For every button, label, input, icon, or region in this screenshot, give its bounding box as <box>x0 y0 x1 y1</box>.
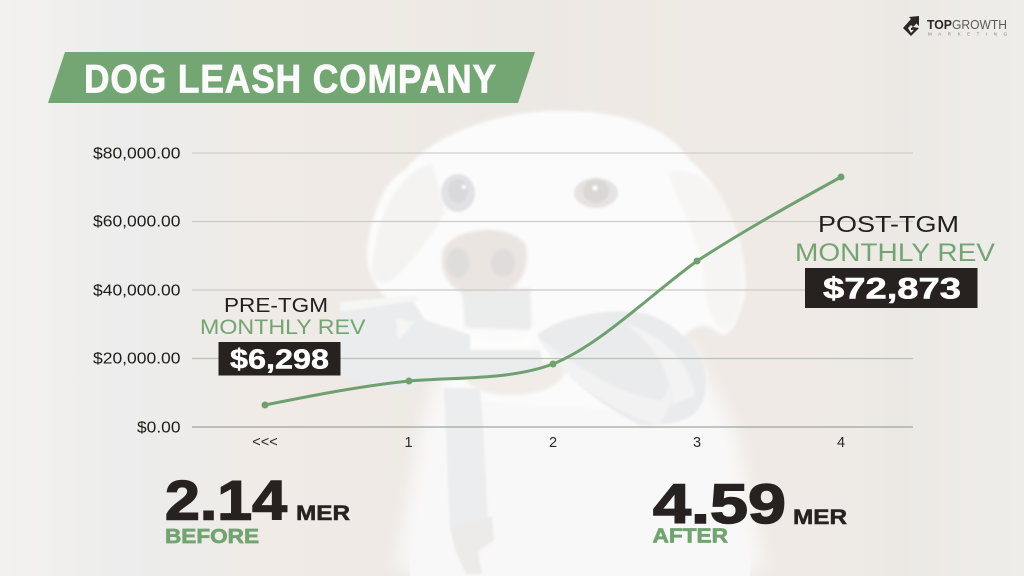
leash strap loops <box>340 295 706 574</box>
y axis labels: $40,000.00 <box>93 282 181 300</box>
x axis labels: <<< <box>252 434 278 450</box>
logo wordmark: TOP <box>927 18 952 32</box>
stat: before MER <box>165 468 350 548</box>
x axis labels: 2 <box>549 435 557 451</box>
callout value: $72,873 <box>823 272 961 306</box>
callout heading: PRE-TGM <box>224 294 328 317</box>
logo wordmark: GROWTH <box>952 18 1007 32</box>
banner shape <box>48 52 535 103</box>
logo tagline: MARKETING <box>928 32 1007 36</box>
callout value box <box>805 268 978 308</box>
y axis labels: $0.00 <box>137 420 181 436</box>
data points <box>262 174 844 408</box>
y axis labels: $80,000.00 <box>93 146 181 162</box>
callout subheading: MONTHLY REV <box>200 316 366 339</box>
title: DOG LEASH COMPANY <box>84 58 497 102</box>
revenue line <box>265 177 841 405</box>
gridlines <box>192 153 913 427</box>
callout value box <box>218 342 340 376</box>
stat caption: AFTER <box>652 524 728 548</box>
dog eyes <box>441 174 618 212</box>
x axis labels: 1 <box>404 435 413 451</box>
stat value: 4.59 <box>653 472 786 535</box>
y axis labels: $20,000.00 <box>93 350 181 368</box>
logo wordmark <box>927 18 1007 32</box>
dog nose and mouth <box>442 230 566 395</box>
callout subheading: MONTHLY REV <box>795 239 995 267</box>
x axis labels <box>252 434 845 451</box>
x axis labels: 3 <box>693 435 701 451</box>
stat unit: MER <box>296 502 350 525</box>
stat value: 2.14 <box>165 468 287 532</box>
y axis labels: $60,000.00 <box>93 214 181 230</box>
callout: post-TGM revenue <box>795 211 995 308</box>
stat: after MER <box>652 472 847 548</box>
title banner <box>48 52 535 103</box>
stat unit: MER <box>793 506 847 529</box>
x axis labels: 4 <box>837 435 845 451</box>
callout: pre-TGM revenue <box>200 294 366 376</box>
stat caption: BEFORE <box>165 525 259 548</box>
callout value: $6,298 <box>230 344 329 374</box>
icon: logo arrow mark <box>903 16 919 36</box>
callout heading: POST-TGM <box>818 211 959 237</box>
y axis labels <box>93 146 181 436</box>
logo: Top Growth Marketing <box>903 16 1007 36</box>
